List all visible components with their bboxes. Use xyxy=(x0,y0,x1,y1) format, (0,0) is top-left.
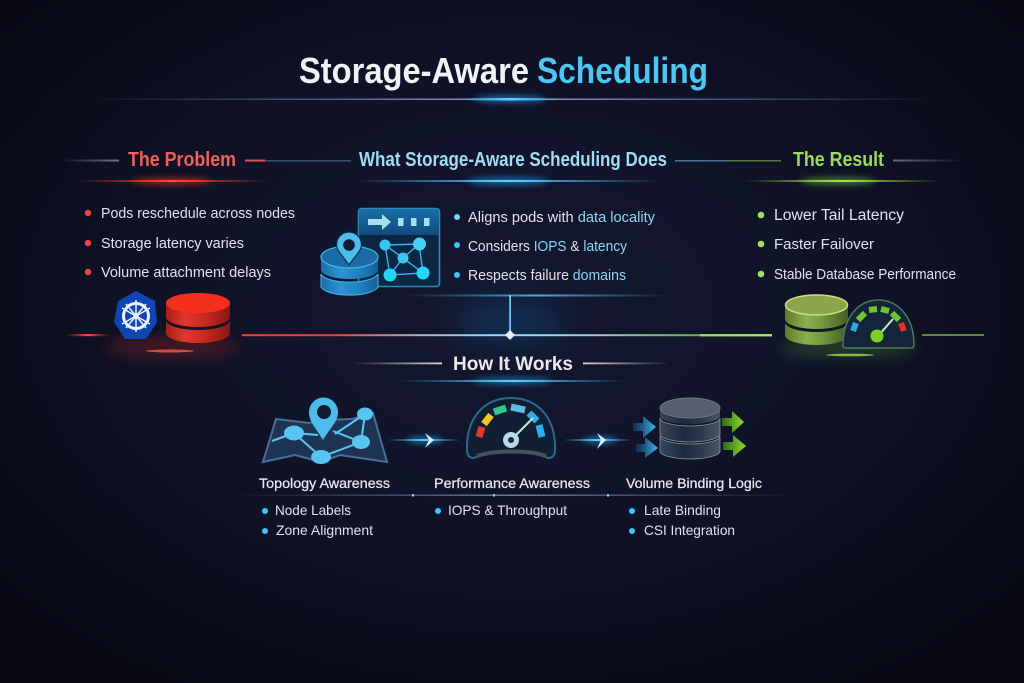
arrow: performance to volume binding xyxy=(563,433,633,449)
title divider glow xyxy=(85,96,940,102)
bullet list: the problem: Pods reschedule across nodes xyxy=(101,206,295,222)
panel: how it works steps xyxy=(230,398,800,538)
panel: the problem xyxy=(60,149,351,354)
panel: what it does xyxy=(321,149,781,295)
bullet list: what it does xyxy=(454,210,656,284)
title xyxy=(299,50,708,91)
bullet list: the result: Stable Database Performance xyxy=(774,267,956,283)
heading glow: the problem xyxy=(78,177,268,185)
step bullets: performance: IOPS & Throughput xyxy=(448,502,567,518)
bullet list: the result xyxy=(758,207,956,283)
title: Scheduling xyxy=(537,50,708,91)
icon: scheduler panel xyxy=(358,208,440,286)
icon: performance gauge xyxy=(467,398,555,458)
heading glow: what it does xyxy=(355,177,661,185)
icon: red database xyxy=(166,293,230,343)
bullet list: the result: Faster Failover xyxy=(774,237,874,253)
heading: the result: The Result xyxy=(793,149,884,171)
step bullets: volume binding: Late Binding xyxy=(644,502,721,518)
bullet list: what it does: Respects failure domains xyxy=(468,268,626,284)
icon: green gauge xyxy=(843,300,914,348)
step bullets: topology: Zone Alignment xyxy=(276,522,373,538)
bullet list: what it does: Considers IOPS & latency xyxy=(468,239,628,255)
step labels: Performance Awareness xyxy=(434,475,590,491)
red floor glow xyxy=(104,340,240,354)
step bullets: topology: Node Labels xyxy=(275,502,351,518)
icon: volume stack with arrows xyxy=(633,398,746,459)
heading rules: the problem xyxy=(60,160,351,162)
step divider xyxy=(230,494,800,496)
how it works rules xyxy=(350,362,670,384)
heading: how it works: How It Works xyxy=(453,354,573,375)
arrow: topology to performance xyxy=(387,433,461,448)
connector: spine xyxy=(66,294,984,342)
title: Storage-Aware xyxy=(299,50,529,91)
heading: what it does: What Storage-Aware Scheduling Does xyxy=(359,149,667,171)
step bullets: volume binding xyxy=(629,502,735,538)
icon: kubernetes xyxy=(114,291,157,339)
icon: topology map xyxy=(263,398,387,464)
step bullets: volume binding: CSI Integration xyxy=(644,522,735,538)
bullet list: the problem: Storage latency varies xyxy=(101,236,244,252)
green floor glow xyxy=(780,340,916,356)
bullet list: what it does: Aligns pods with data locality xyxy=(468,210,656,226)
bullet list: the problem xyxy=(85,206,295,281)
heading rule: the result xyxy=(893,160,963,162)
step labels xyxy=(259,475,762,491)
heading rules: what it does xyxy=(675,160,781,162)
step bullets: topology xyxy=(262,502,373,538)
step labels: Volume Binding Logic xyxy=(626,475,762,491)
bullet list: the problem: Volume attachment delays xyxy=(101,265,271,281)
icon: blue database with pin xyxy=(321,232,378,295)
panel: the result xyxy=(745,149,963,356)
icon: green database xyxy=(785,295,848,345)
bullet list: the result: Lower Tail Latency xyxy=(774,207,904,224)
step labels: Topology Awareness xyxy=(259,475,390,491)
heading: the problem: The Problem xyxy=(128,149,236,171)
heading glow: the result xyxy=(745,177,940,185)
